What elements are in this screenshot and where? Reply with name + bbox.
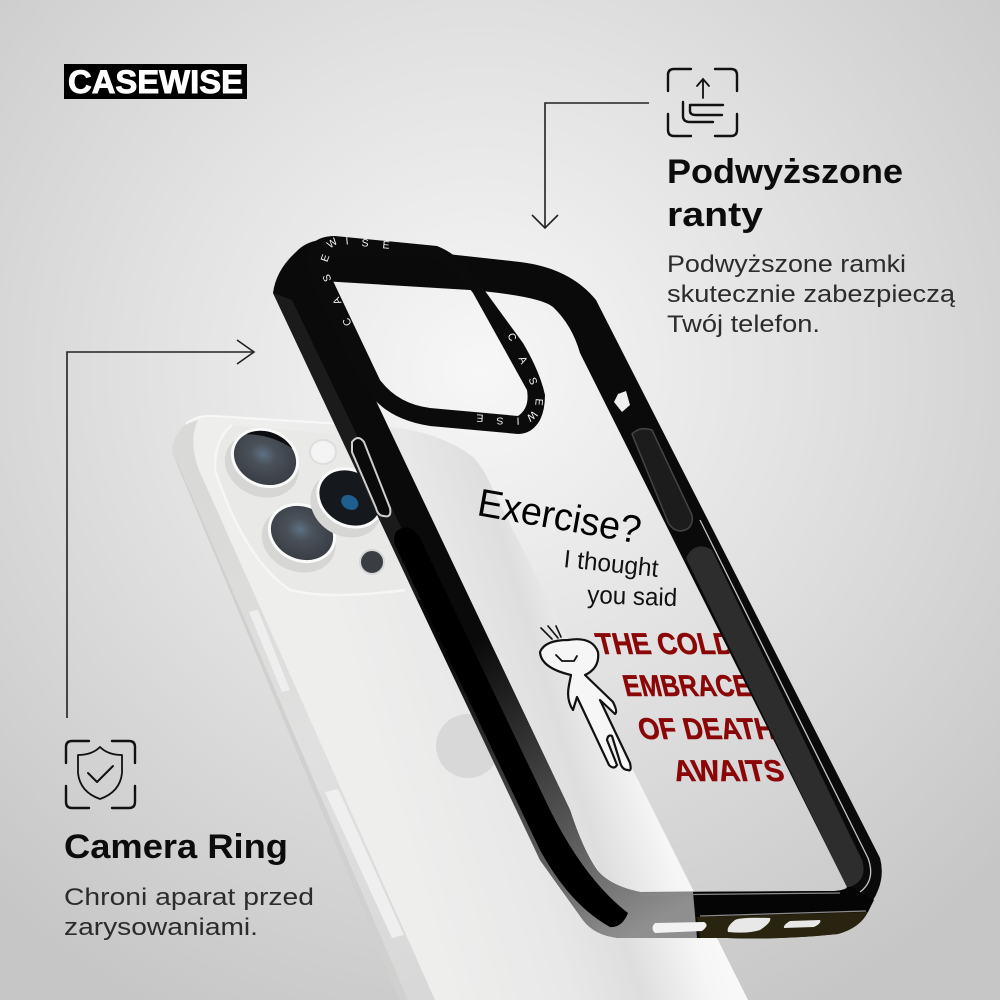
text: camera ring description: zarysowaniami. xyxy=(64,914,258,941)
bottom bar highlight xyxy=(640,893,866,916)
artwork: the cold embrace of death awaits: AWAITS xyxy=(669,754,788,788)
ring lettering: E xyxy=(532,398,545,406)
camera bump xyxy=(215,425,405,595)
ring lettering: A xyxy=(331,295,344,306)
text: raised edges description: Twój telefon. xyxy=(667,311,820,338)
ring lettering: E xyxy=(319,253,332,264)
artwork: I thought: I thought xyxy=(562,545,660,583)
port: usb xyxy=(728,918,770,933)
ring lettering: C xyxy=(504,331,519,344)
sensor xyxy=(360,550,384,574)
ring lettering: C xyxy=(340,316,354,328)
lens: top xyxy=(214,416,312,509)
artwork: the cold embrace of death awaits xyxy=(592,627,788,788)
arrow: camera ring xyxy=(67,340,254,718)
text: raised edges description: Podwyższone ramki xyxy=(667,251,906,278)
arrow: raised edges xyxy=(532,103,649,228)
side button right xyxy=(632,429,692,531)
ring lettering: E xyxy=(476,411,484,424)
side hole xyxy=(614,391,630,412)
camera ring xyxy=(307,235,545,434)
text: camera ring description xyxy=(64,884,314,941)
ring lettering: I xyxy=(516,414,520,427)
left strip slot xyxy=(394,527,628,927)
ring lettering xyxy=(319,235,545,427)
side button lower xyxy=(325,789,404,938)
heading: raised edges xyxy=(667,153,903,234)
ring lettering: S xyxy=(526,376,539,387)
lens: right xyxy=(298,454,397,550)
text: raised edges description xyxy=(667,251,956,338)
bottom lip xyxy=(697,912,868,938)
icon: raised edges xyxy=(668,69,737,136)
artwork: you said: you said xyxy=(587,581,678,612)
heading: camera ring: Camera Ring xyxy=(64,828,288,866)
ring lettering: W xyxy=(524,408,539,423)
text: raised edges description: skutecznie zabezpieczą xyxy=(667,281,956,308)
artwork: the cold embrace of death awaits: EMBRACE xyxy=(619,669,755,703)
side button upper xyxy=(249,610,290,692)
lens: bottom xyxy=(251,491,349,584)
artwork: Exercise heading: Exercise? xyxy=(474,482,644,553)
ring lettering: S xyxy=(496,414,504,426)
ring lettering: A xyxy=(516,354,529,366)
apple logo xyxy=(436,714,500,778)
artwork: stick figure xyxy=(540,626,631,770)
ring lettering: S xyxy=(321,272,334,283)
case artwork xyxy=(474,482,788,788)
black button on left strip xyxy=(352,438,390,516)
ring lettering: S xyxy=(361,237,369,250)
heading: raised edges: ranty xyxy=(667,196,763,234)
frame outline xyxy=(273,240,882,938)
logo: casewise: CASEWISE xyxy=(68,64,243,100)
right strip recess xyxy=(686,546,864,887)
right strip highlight xyxy=(700,520,871,892)
flash xyxy=(310,440,336,464)
frame side band xyxy=(273,293,436,600)
bottom bar xyxy=(693,886,874,917)
heading: raised edges: Podwyższone xyxy=(667,153,903,191)
text: camera ring description: Chroni aparat przed xyxy=(64,884,314,911)
white phone xyxy=(172,416,748,1000)
ring lettering: W xyxy=(325,236,340,251)
ring lettering: I xyxy=(345,235,349,248)
lower left translucent band xyxy=(417,600,697,938)
icon: shield check xyxy=(66,741,135,808)
artwork: the cold embrace of death awaits: OF DEATH xyxy=(634,712,779,746)
case frame xyxy=(273,240,882,938)
port: speaker xyxy=(652,922,707,933)
artwork: the cold embrace of death awaits: THE COLD xyxy=(592,627,738,661)
port: mic xyxy=(784,920,820,928)
ring lettering: E xyxy=(382,239,390,252)
